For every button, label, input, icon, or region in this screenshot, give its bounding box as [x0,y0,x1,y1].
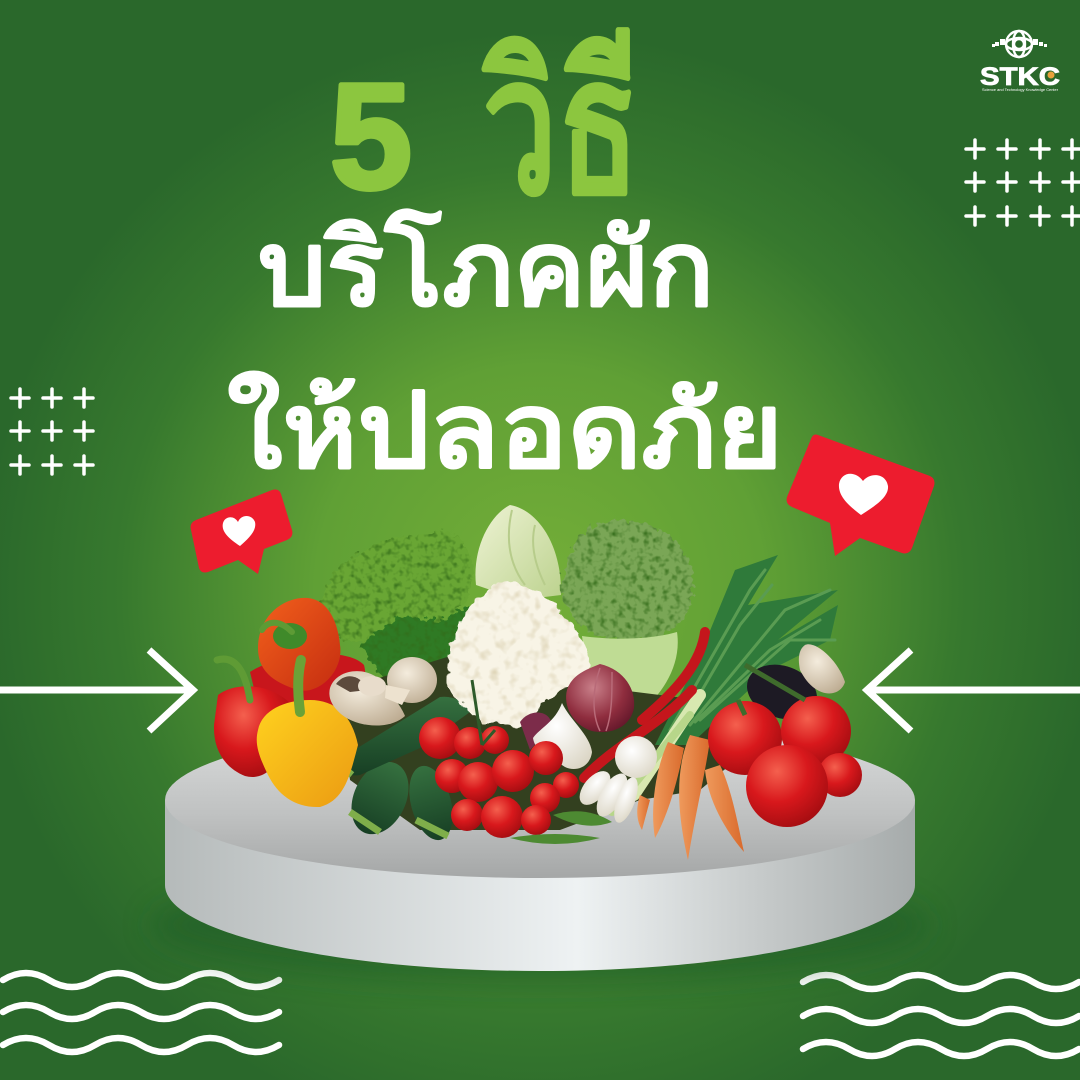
scallions [612,555,838,812]
heart bubble: right [787,434,934,556]
mushrooms [329,657,437,726]
plus pattern: left [11,389,93,474]
title: 5 วิธี: 5 [330,52,412,220]
peas [510,811,612,844]
lettuce [322,531,472,645]
mushroom: right [799,644,845,693]
pile shadow backdrop [340,650,760,830]
red onion [520,664,634,750]
pepper: red background [250,654,365,709]
cherry tomatoes [419,680,579,838]
eggplant [739,655,825,729]
pepper: yellow [257,660,358,807]
title: 5 วิธี [330,19,640,234]
title: 5 วิธี: วิธี [482,19,640,234]
cabbage: pale green [582,632,678,712]
waves: bottom left [3,973,279,1052]
zucchini [338,697,470,845]
waves: bottom right [803,975,1079,1056]
vegetables [214,505,862,860]
arrow: right [867,650,1080,731]
heart bubble: left [191,490,292,574]
pepper: red [214,659,292,777]
logo: STKC: Science and Technology Knowledge Center [982,87,1059,92]
title: บริโภคผัก: บริโภคผัก [258,211,714,328]
arrow: left [0,650,193,731]
red chili peppers [584,632,705,778]
cabbage: top [475,505,561,600]
logo: STKC: STKC [980,63,1060,91]
pepper: orange [258,598,340,691]
pedestal [150,722,930,985]
cauliflower [447,582,590,726]
carrots [637,735,744,860]
title: ให้ปลอดภัย: ให้ปลอดภัย [227,373,783,490]
logo: STKC [980,31,1060,92]
broccoli [562,520,693,640]
plus pattern: top right [966,140,1080,225]
garlic [533,703,657,826]
right tomatoes [708,665,862,827]
parsley [360,605,472,680]
